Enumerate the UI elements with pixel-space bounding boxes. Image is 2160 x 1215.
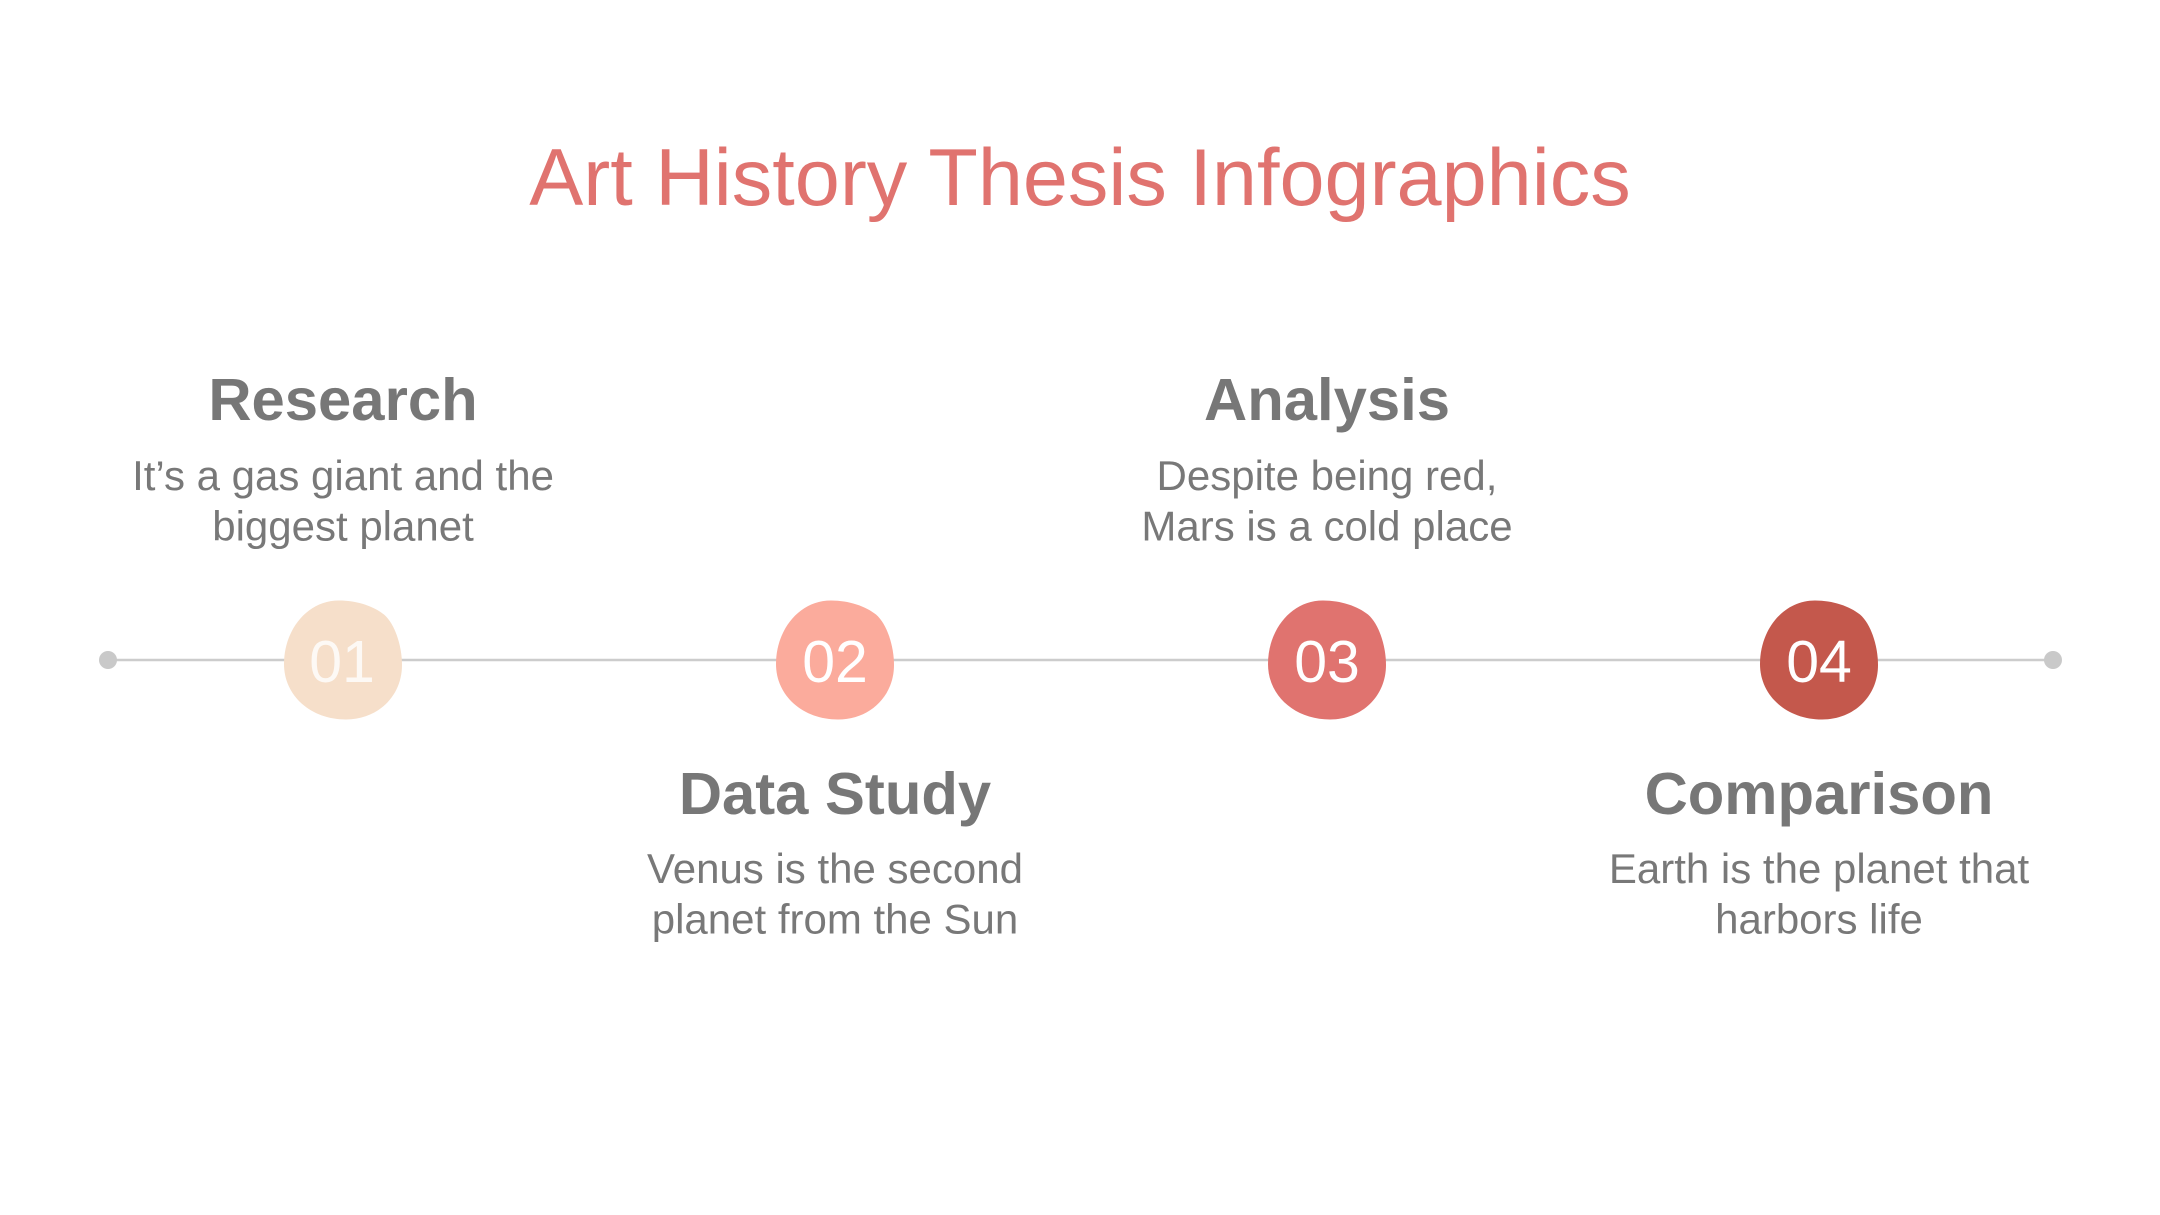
badge: 02: 02 <box>802 629 868 695</box>
step 3: analysis <box>1141 366 1513 720</box>
heading: comparison: Comparison <box>1645 760 1993 827</box>
timeline line <box>99 651 2062 669</box>
step 4: comparison <box>1609 600 2029 942</box>
badge: 01: 01 <box>309 629 375 695</box>
description: data study: Venus is the second <box>647 845 1023 892</box>
step 1: research <box>132 366 554 720</box>
description: comparison: harbors life <box>1715 896 1923 942</box>
badge: 03 <box>1268 600 1386 720</box>
badge: 01 <box>284 600 402 720</box>
description: analysis: Mars is a cold place <box>1141 502 1513 550</box>
step 2: data study <box>647 600 1023 942</box>
heading: research: Research <box>208 366 478 433</box>
badge: 04: 04 <box>1786 629 1852 695</box>
badge: 03: 03 <box>1294 629 1360 695</box>
heading: analysis: Analysis <box>1204 366 1450 433</box>
badge: 04 <box>1760 600 1878 720</box>
description: research: biggest planet <box>212 502 474 550</box>
description: research: It’s a gas giant and the <box>132 452 554 499</box>
badge: 02 <box>776 600 894 720</box>
title: Art History Thesis Infographics <box>529 133 1631 223</box>
description: data study: planet from the Sun <box>652 896 1018 942</box>
description: analysis: Despite being red, <box>1157 452 1497 499</box>
description: comparison: Earth is the planet that <box>1609 845 2029 892</box>
heading: data study: Data Study <box>679 760 991 827</box>
